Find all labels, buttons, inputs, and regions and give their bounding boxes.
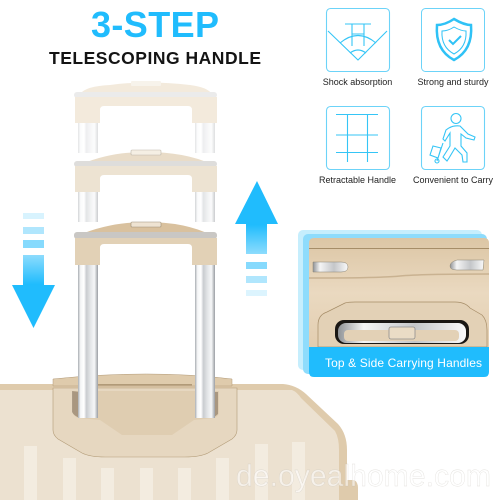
icon: shock absorption [326, 8, 390, 72]
label: strong and sturdy: Strong and sturdy [417, 77, 489, 87]
arrow: down [12, 213, 55, 328]
feature icons [319, 8, 494, 185]
panel caption bar [309, 347, 489, 377]
arrow: up [235, 181, 278, 296]
label: shock absorption: Shock absorption [323, 77, 392, 87]
suitcase with telescoping handle [0, 81, 358, 500]
label: retractable handle: Retractable Handle [319, 175, 396, 185]
icon: retractable handle [326, 106, 390, 170]
panel backing layers [298, 230, 487, 374]
panel: carrying handles detail [298, 230, 489, 377]
handle position 3 (lowest, solid) [74, 222, 217, 265]
subtitle: telescoping handle: TELESCOPING HANDLE [49, 48, 261, 68]
panel caption: Top & Side Carrying Handles [325, 356, 482, 370]
watermark: de.oyealhome.com [236, 458, 491, 493]
panel photo [309, 238, 489, 348]
suitcase ribs [24, 442, 305, 500]
handle position 2 (faded) [74, 150, 217, 222]
handle poles [78, 265, 215, 418]
icon: traveler carrying luggage [422, 106, 484, 170]
icon: shield [422, 8, 484, 72]
handle position 1 (top, most faded) [74, 81, 217, 153]
title: 3-STEP: 3-STEP [91, 4, 219, 45]
suitcase body [0, 374, 358, 500]
label: convenient to carry: Convenient to Carry [413, 175, 494, 185]
